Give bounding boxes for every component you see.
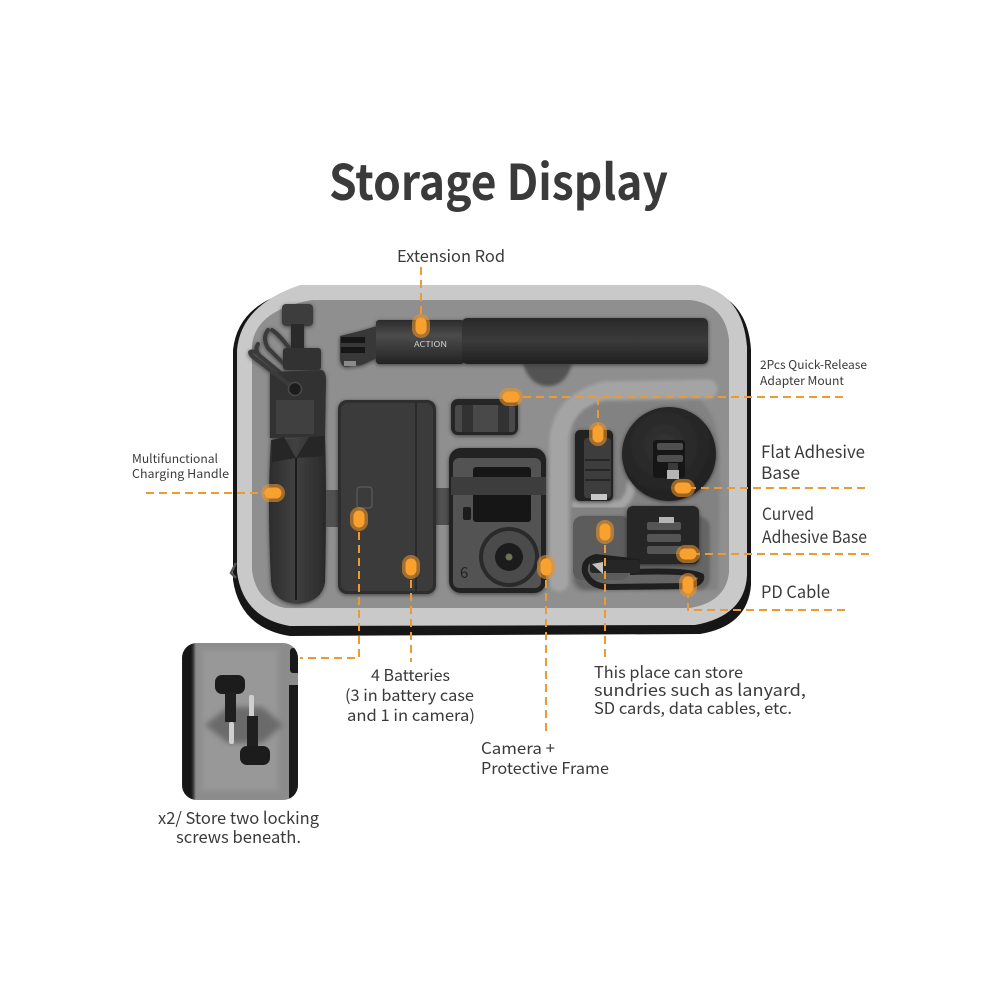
foam tray [252,300,729,608]
quick-release adapter mount [575,430,613,501]
callout: flat adhesive base: Base [761,459,800,484]
small adapter mount [451,399,518,435]
multifunctional charging handle [250,304,326,604]
case outer zipper shell [233,289,751,636]
flat adhesive base [622,407,716,501]
inset photo: locking screws [180,640,301,805]
lower pocket shadow [574,516,710,590]
callout: camera and protective frame: Protective Frame [481,755,609,779]
foam divider ridge [576,482,632,505]
velcro strap: battery case side [326,490,340,527]
PD cable [585,557,701,587]
callout: quick-release adapter mount: Adapter Mount [760,372,844,389]
callout: batteries: and 1 in camera) [347,702,475,726]
rod brand text: ACTION [414,339,447,350]
callout: sundries: This place can store [594,659,743,683]
callout: batteries [345,558,475,726]
storage case [231,285,751,636]
sundries compartment [573,516,629,580]
velcro strap: camera side [433,488,453,525]
foam well for adapter mounts [571,400,720,592]
case light rim [237,285,747,626]
callout: extension rod [397,243,505,334]
callout: sundries: sundries such as lanyard, [594,677,806,701]
callout: PD cable [682,576,845,610]
camera model number: 6 [460,562,468,583]
callout: PD cable: PD Cable [761,578,830,603]
inset caption: x2/ Store two locking [158,805,320,829]
zipper pull [231,563,236,578]
callout: extension rod: Extension Rod [397,243,505,267]
callout: charging handle: Charging Handle [132,465,229,482]
callout: camera and protective frame [481,558,609,779]
inset caption: screws beneath. [176,824,301,848]
foam thumb notch [523,364,572,386]
callout: charging handle [132,450,282,498]
callout: charging handle: Multifunctional [132,450,218,467]
callout: curved adhesive base: Adhesive Base [762,523,867,548]
raised foam ridge [559,389,708,582]
callout: quick-release adapter mount: 2Pcs Quick-Release [760,356,867,373]
callout: flat adhesive base [674,438,865,494]
callout: curved adhesive base: Curved [762,500,814,525]
callout: quick-release adapter mount [502,356,867,442]
callout connector: locking screws [300,510,364,658]
title: Storage Display [329,144,668,215]
extension rod [340,318,708,367]
inset caption [158,805,320,848]
callout: batteries: (3 in battery case [345,682,474,706]
callout: camera and protective frame: Camera + [481,735,555,759]
callout: flat adhesive base: Flat Adhesive [761,438,865,463]
callout: curved adhesive base [680,500,869,560]
callout: sundries: SD cards, data cables, etc. [594,695,792,719]
callout: batteries: 4 Batteries [371,662,450,686]
battery case [338,400,436,594]
callout: sundries [594,524,806,719]
action camera [449,448,546,593]
curved adhesive base [627,506,699,564]
